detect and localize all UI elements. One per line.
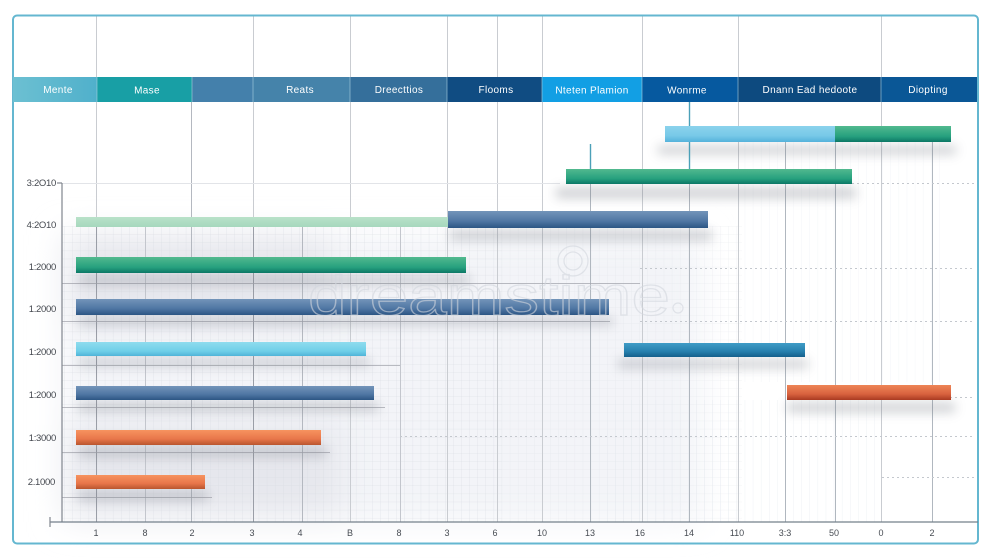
header: Wonrme	[642, 77, 738, 102]
bar: red orange	[787, 385, 951, 400]
x axis labels: 2	[929, 528, 935, 538]
bar: cyan	[76, 342, 366, 356]
header: Dreecttios	[350, 77, 447, 102]
header: Diopting	[881, 77, 977, 102]
y axis labels	[27, 178, 56, 488]
header: Dnann Ead hedoote	[738, 77, 881, 102]
x axis labels: 0	[878, 528, 884, 538]
bar: slate blue, long	[76, 299, 609, 315]
vertical grid lines	[96, 15, 932, 522]
background fine grid	[62, 142, 942, 522]
x axis labels: 3	[249, 528, 255, 538]
teal milestone markers	[590, 102, 690, 170]
watermark: dreamstime	[308, 264, 670, 327]
x axis labels: B	[347, 528, 353, 538]
x axis labels: 13	[585, 528, 595, 538]
x axis labels: 110	[730, 528, 744, 538]
bar: teal blue	[624, 343, 805, 357]
bar shadows	[78, 146, 956, 500]
x axis labels: 3:3	[779, 528, 791, 538]
axes	[50, 183, 978, 527]
header: Mase: Mase	[134, 86, 160, 96]
header: Flooms	[447, 77, 542, 102]
y axis labels: 1:2000	[29, 390, 56, 401]
header: Reats: Reats	[286, 85, 314, 96]
bar: green, long	[76, 257, 466, 273]
bar: pale mint	[76, 217, 448, 227]
x axis labels: 50	[829, 528, 839, 538]
header: Diopting: Diopting	[908, 85, 948, 96]
header: Nieten Plamion: Nteten Plamion	[555, 86, 629, 96]
header: Dnann Ead hedoote: Dnann Ead hedoote	[763, 85, 858, 96]
horizontal grid lines	[62, 184, 975, 498]
bar: orange, short	[76, 475, 205, 489]
watermark	[308, 246, 683, 327]
x axis labels: 3	[444, 528, 450, 538]
header: Flooms: Flooms	[479, 85, 513, 96]
x axis labels: 16	[635, 528, 645, 538]
x axis labels: 6	[492, 528, 498, 538]
header: blank segment	[192, 77, 253, 102]
y axis labels: 3:2O10	[27, 178, 56, 189]
header: Dreecttios: Dreecttios	[375, 85, 423, 96]
header: Mente: Mente	[43, 85, 73, 96]
bar: slate blue, short	[76, 386, 374, 400]
header: Mente	[13, 77, 97, 102]
header: Reats	[253, 77, 350, 102]
header: Nieten Plamion	[542, 77, 642, 102]
x axis labels: 4	[297, 528, 303, 538]
y axis labels: 1:2000	[29, 262, 56, 273]
y axis labels: 1:2000	[29, 347, 56, 358]
bar: orange	[76, 430, 321, 445]
x axis labels: 14	[684, 528, 694, 538]
y axis labels: 1.2000	[29, 304, 56, 315]
bar: slate blue, third row	[448, 211, 708, 228]
x axis labels: 2	[189, 528, 195, 538]
header band	[13, 77, 977, 102]
y axis labels: 4:2O10	[27, 220, 56, 231]
bar: sky blue and green, top row	[665, 126, 951, 142]
y axis labels: 1:3000	[29, 433, 56, 444]
x axis labels: 8	[396, 528, 402, 538]
bar: green, second row	[566, 169, 852, 184]
y axis labels: 2.1000	[28, 477, 55, 488]
x axis labels: 10	[537, 528, 547, 538]
header: Wonrme: Wonrme	[667, 86, 707, 96]
x axis labels: 1	[93, 528, 99, 538]
x axis labels	[93, 528, 935, 538]
header: Mase	[97, 77, 192, 102]
x axis labels: 8	[142, 528, 148, 538]
